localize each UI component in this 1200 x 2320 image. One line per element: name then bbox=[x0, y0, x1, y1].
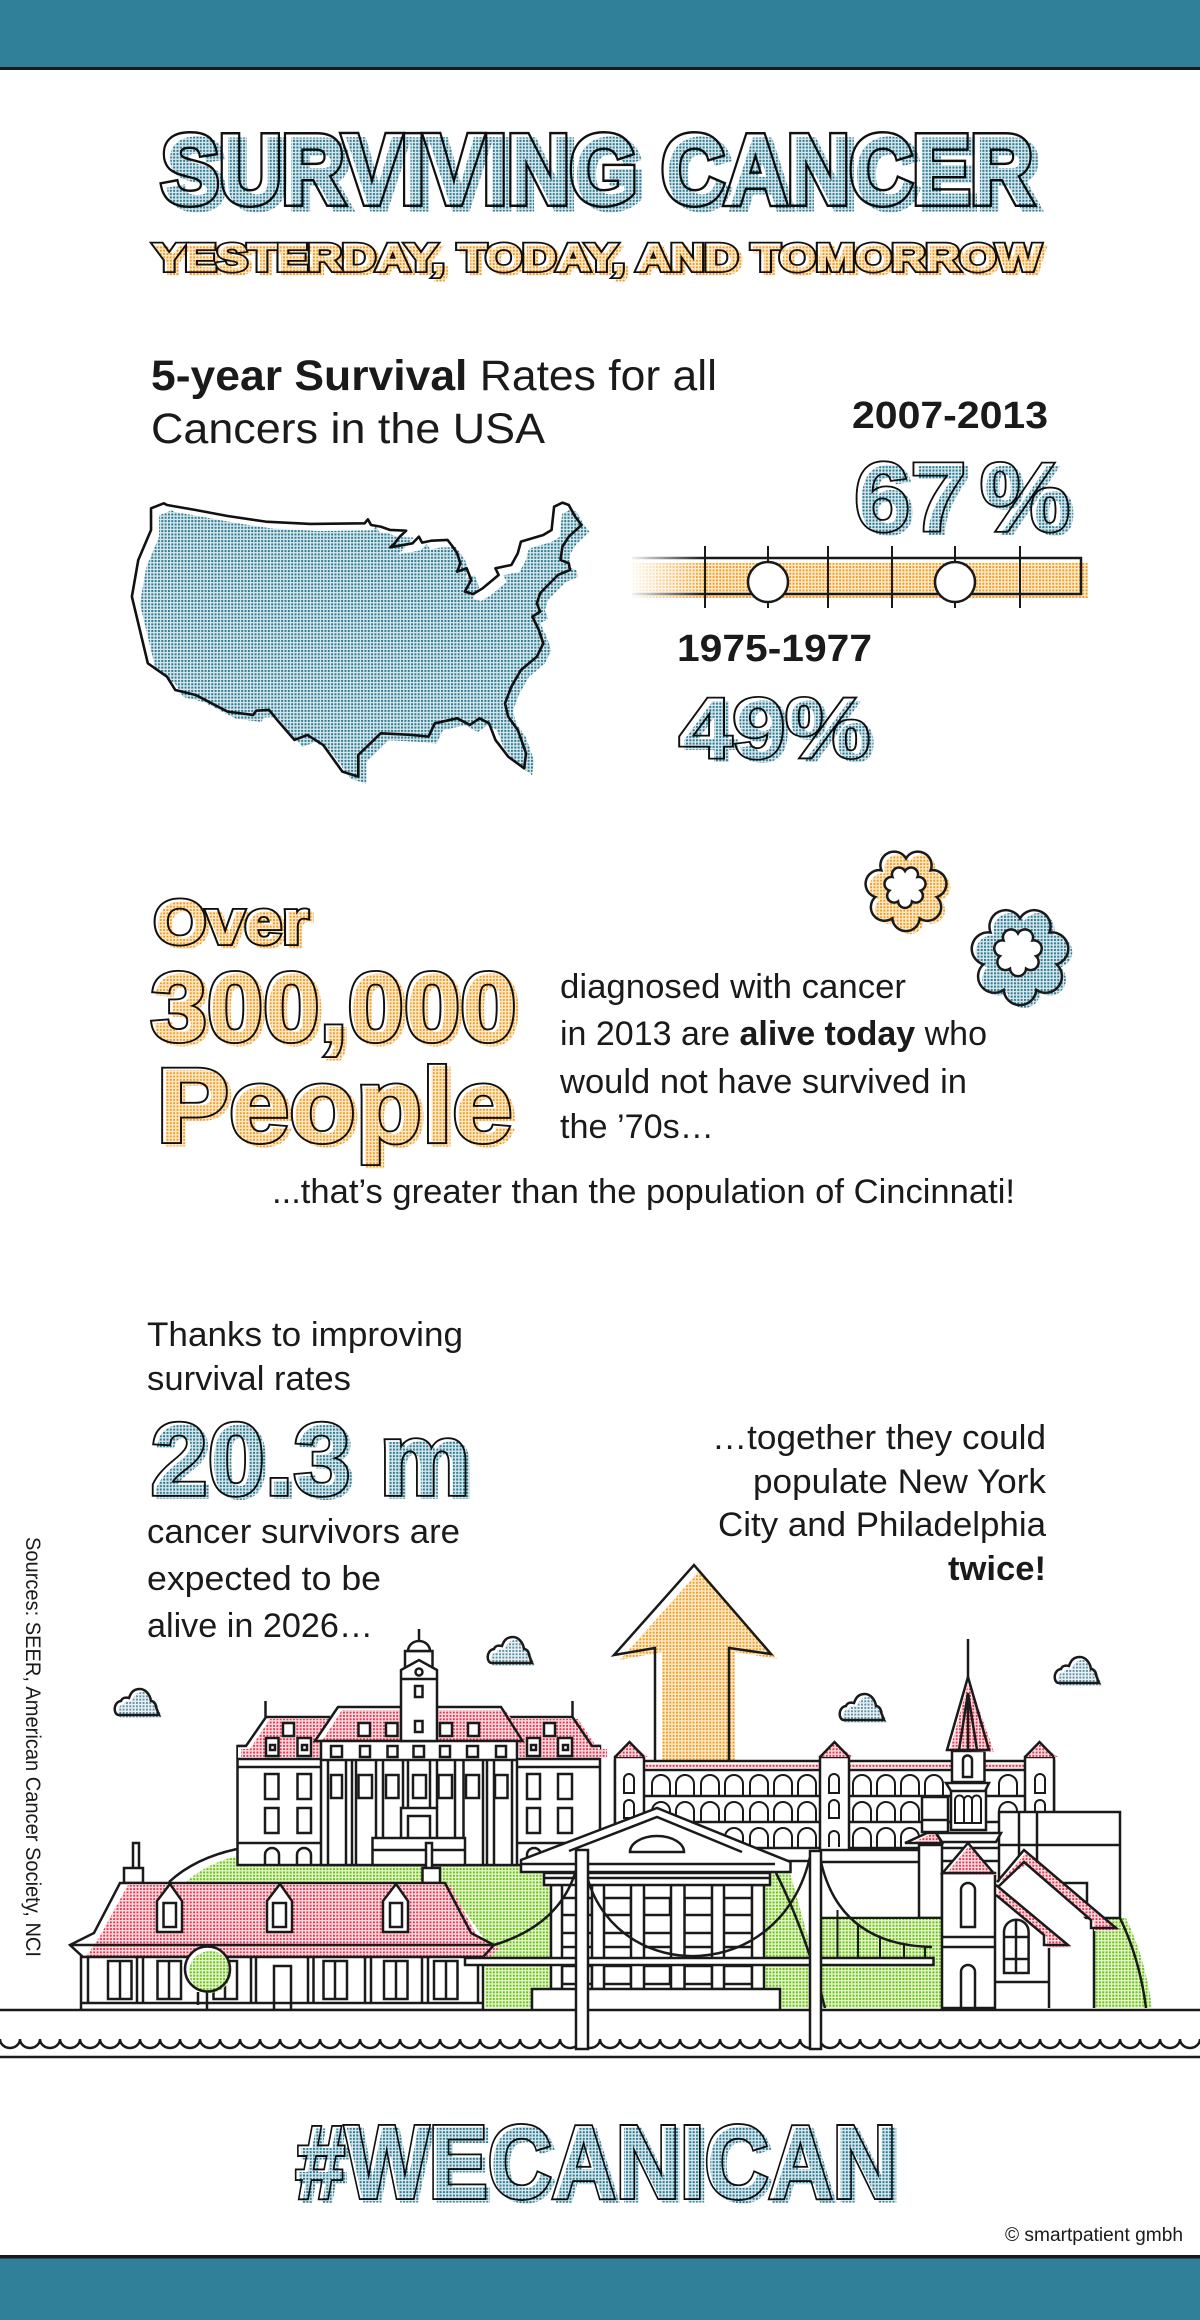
text: cancer survivors expected bbox=[147, 1513, 460, 1645]
text: diagnosed with cancer bbox=[559, 968, 987, 1146]
palace with tower bbox=[238, 1629, 607, 1865]
stat: 67%: 67 % bbox=[854, 442, 1070, 552]
icon: blue flower bbox=[972, 910, 1072, 1008]
hashtag: #WECANICAN bbox=[296, 2104, 896, 2220]
hashtag: #WECANICAN bbox=[300, 2108, 900, 2222]
title: SURVIVING CANCER bbox=[161, 115, 1033, 224]
copyright: © smartpatient gmbh bbox=[1005, 2225, 1183, 2246]
ground and water bbox=[0, 2010, 1200, 2057]
stat: 20.3 m: 20.3 m bbox=[150, 1402, 470, 1516]
long house bbox=[70, 1843, 500, 2010]
stat: 49%: 49% bbox=[684, 685, 875, 780]
icon: orange flower bbox=[866, 852, 950, 934]
text: cancer survivors expected: expected to be bbox=[147, 1560, 381, 1598]
heading: 5-year survival rates bbox=[151, 352, 717, 453]
text: Cincinnati comparison: ...that’s greater than the population of Cincinnati! bbox=[272, 1173, 1015, 1211]
text: diagnosed with cancer: in 2013 are alive today who bbox=[560, 1015, 987, 1053]
hashtag: #WECANICAN bbox=[296, 2104, 896, 2220]
stat: 67%: 67 % bbox=[854, 442, 1070, 552]
heading: Over 300,000 People: 300,000 bbox=[150, 952, 516, 1062]
heading: Over 300,000 People: 300,000 bbox=[150, 952, 516, 1062]
text: together they could populate: City and Philadelphia bbox=[718, 1506, 1046, 1544]
back castle with arches bbox=[615, 1742, 1058, 1861]
stat: 49%: 49% bbox=[679, 682, 870, 776]
heading: 5-year survival rates: 5-year Survival Rates for all bbox=[151, 352, 717, 400]
pediment building bbox=[521, 1808, 790, 2012]
stat: 20.3 m: 20.3 m bbox=[150, 1402, 470, 1516]
sources: Sources: SEER, American Cancer Society, NCI bbox=[21, 1537, 44, 1957]
text: thanks to improving survival rates: Thanks to improving bbox=[147, 1316, 463, 1354]
title: SURVIVING CANCER bbox=[161, 115, 1033, 224]
text: diagnosed with cancer: diagnosed with cancer bbox=[560, 968, 906, 1006]
label: 1975-1977: 1975-1977 bbox=[677, 628, 872, 670]
heading: Over 300,000 People: People bbox=[156, 1048, 512, 1164]
text: cancer survivors expected: cancer survivors are bbox=[147, 1513, 460, 1551]
stat: 49%: 49% bbox=[679, 682, 870, 776]
palace roofs bbox=[238, 1701, 607, 1759]
clock tower bbox=[401, 1629, 437, 1741]
nave bbox=[996, 1856, 1094, 2008]
heading: Over 300,000 People: People bbox=[160, 1050, 516, 1168]
label: 2007-2013: 2007-2013 bbox=[852, 395, 1048, 437]
heading: Over 300,000 People: Over bbox=[154, 888, 308, 958]
map of the USA bbox=[132, 503, 590, 784]
subtitle: YESTERDAY, TODAY, AND TOMORROW bbox=[154, 238, 1041, 280]
church with spire and rear hall bbox=[821, 1639, 1120, 2008]
heading: Over 300,000 People: Over bbox=[158, 892, 312, 960]
tree bbox=[185, 1946, 231, 2010]
text: diagnosed with cancer: would not have survived in bbox=[559, 1063, 967, 1101]
top band bbox=[0, 0, 1200, 70]
icon: up arrow bbox=[614, 1565, 777, 1760]
heading: Over 300,000 People bbox=[150, 888, 520, 1168]
house roof bbox=[70, 1883, 500, 1959]
heading: Over 300,000 People: 300,000 bbox=[154, 956, 520, 1064]
text: together they could populate: …together they could bbox=[712, 1419, 1046, 1457]
text: cancer survivors expected: alive in 2026… bbox=[147, 1607, 373, 1645]
text: diagnosed with cancer: the ’70s… bbox=[560, 1108, 714, 1146]
text: together they could populate: twice! bbox=[948, 1550, 1046, 1588]
city skyline bbox=[0, 1629, 1200, 2057]
suspension bridge bbox=[465, 1850, 934, 2049]
text: together they could populate: populate New York bbox=[753, 1463, 1047, 1501]
text: together they could populate bbox=[712, 1419, 1047, 1588]
subtitle: YESTERDAY, TODAY, AND TOMORROW bbox=[154, 238, 1041, 280]
subtitle: YESTERDAY, TODAY, AND TOMORROW bbox=[158, 240, 1045, 282]
timeline bar bbox=[628, 546, 1088, 608]
dormers bbox=[157, 1884, 408, 1932]
church tower bbox=[942, 1873, 995, 2008]
heading: Over 300,000 People: People bbox=[156, 1048, 512, 1164]
green hills bbox=[169, 1849, 1152, 2008]
stat: 20.3 m: 20.3 m bbox=[154, 1406, 474, 1520]
heading: Over 300,000 People: Over bbox=[154, 888, 308, 958]
text: thanks to improving survival rates bbox=[147, 1316, 463, 1398]
stat: 67%: 67 % bbox=[859, 446, 1075, 555]
clouds bbox=[115, 1637, 1102, 1723]
text: thanks to improving survival rates: survival rates bbox=[147, 1360, 351, 1398]
bottom band bbox=[0, 2255, 1200, 2320]
title: SURVIVING CANCER bbox=[168, 120, 1040, 229]
heading: 5-year survival rates: Cancers in the USA bbox=[151, 405, 545, 453]
